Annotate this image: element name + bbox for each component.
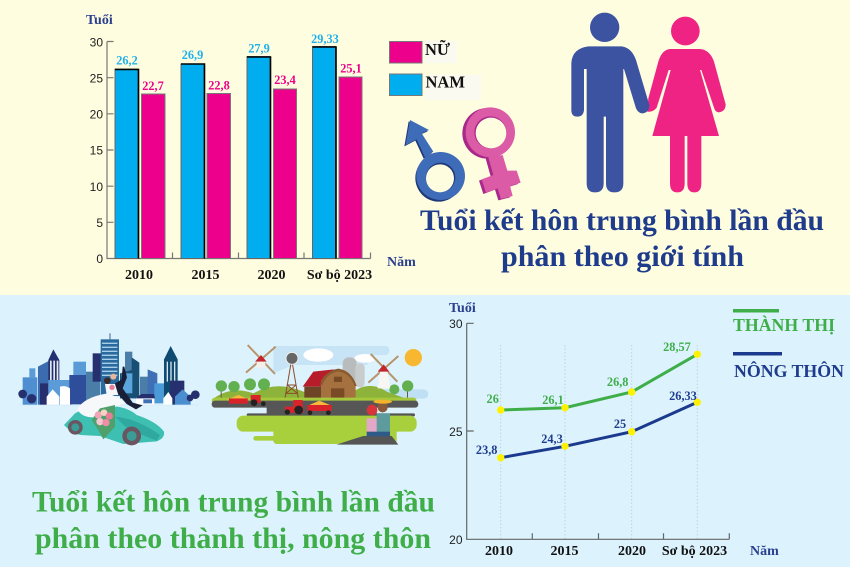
x labels: 2020 bbox=[258, 268, 286, 283]
hills bbox=[212, 386, 410, 400]
legend label: nong thon: NÔNG THÔN bbox=[734, 360, 844, 381]
value labels: thanh thi: 28,57 bbox=[663, 340, 691, 354]
line: nong thon bbox=[501, 402, 697, 458]
illustration: city and wedding car bbox=[18, 333, 200, 445]
value labels: nong thon: 26,33 bbox=[669, 389, 697, 403]
point markers bbox=[497, 351, 701, 461]
bouquet bbox=[92, 405, 115, 439]
y tick labels: 30 bbox=[90, 36, 103, 50]
tractor small with trailer bbox=[229, 395, 266, 406]
legend label: nam: NAM bbox=[426, 72, 465, 92]
ground and road bbox=[212, 398, 418, 444]
icon: female symbol bbox=[462, 107, 521, 200]
value labels: nu: 22,8 bbox=[208, 78, 230, 92]
legend line: nong thon bbox=[733, 352, 782, 356]
couple sitting bbox=[337, 400, 398, 445]
silos bbox=[343, 357, 365, 387]
value labels: thanh thi: 26,1 bbox=[542, 393, 564, 407]
x labels: Sơ bộ 2023 bbox=[307, 268, 372, 283]
trees bbox=[216, 378, 413, 398]
value labels: thanh thi bbox=[487, 340, 691, 407]
sky clouds bbox=[273, 346, 428, 399]
wedding car bbox=[64, 393, 164, 445]
value labels: nong thon: 23,8 bbox=[476, 443, 497, 457]
axes bbox=[107, 42, 370, 258]
legend line: thanh thi bbox=[733, 309, 779, 312]
barn bbox=[303, 369, 357, 399]
legend swatch: nam bbox=[390, 74, 422, 96]
icon: woman figure bbox=[647, 17, 726, 192]
x labels: 2015 bbox=[192, 268, 220, 283]
x axis title: Năm bbox=[387, 255, 416, 270]
x labels: Sơ bộ 2023 bbox=[662, 544, 727, 559]
y tick labels: 0 bbox=[96, 252, 103, 266]
x labels: 2020 bbox=[618, 544, 646, 559]
value labels: nong thon bbox=[476, 389, 697, 457]
icon: man figure bbox=[571, 13, 649, 192]
legend: urban rural bbox=[733, 309, 844, 381]
illustration: countryside farm bbox=[212, 345, 428, 445]
value labels: nu: 23,4 bbox=[274, 73, 296, 87]
city skyline bbox=[18, 333, 200, 405]
value labels: nam: 26,9 bbox=[182, 48, 203, 62]
heading: urban rural: phân theo thành thị, nông thôn bbox=[35, 523, 431, 555]
y axis title: Tuổi bbox=[449, 301, 476, 316]
y tick labels: 25 bbox=[449, 425, 463, 439]
x labels: 2015 bbox=[550, 544, 578, 559]
legend swatch: nu bbox=[390, 42, 422, 63]
tractor large with trailer bbox=[285, 400, 332, 415]
value labels: nong thon: 25 bbox=[614, 417, 626, 431]
value labels: nu: 25,1 bbox=[340, 62, 362, 76]
panel: bottom background bbox=[0, 295, 850, 567]
water tower windmill bbox=[285, 352, 298, 398]
x axis title: Năm bbox=[750, 544, 779, 559]
icon: sun bbox=[405, 349, 422, 366]
heading: urban rural: Tuổi kết hôn trung bình lần đầu bbox=[32, 486, 435, 518]
y tick labels: 25 bbox=[90, 72, 103, 86]
value labels: thanh thi: 26 bbox=[487, 392, 499, 406]
y tick labels bbox=[90, 36, 103, 266]
x labels bbox=[125, 268, 372, 283]
y tick labels: 5 bbox=[96, 216, 103, 230]
bars: nam bbox=[115, 46, 336, 258]
windmill left bbox=[246, 345, 276, 374]
y tick labels: 15 bbox=[90, 144, 103, 158]
line chart: age by urban and rural bbox=[449, 301, 779, 559]
value labels: nu: 22,7 bbox=[142, 79, 164, 93]
y axis title: Tuổi bbox=[86, 13, 113, 28]
bride and groom bbox=[104, 367, 143, 409]
heading: gender: Tuổi kết hôn trung bình lần đầu bbox=[420, 205, 824, 237]
y tick labels: 10 bbox=[90, 180, 103, 194]
heading: gender: phân theo giới tính bbox=[501, 241, 744, 273]
legend label: thanh thi: THÀNH THỊ bbox=[733, 314, 835, 335]
dotted guides bbox=[501, 345, 697, 539]
y tick labels: 20 bbox=[90, 108, 103, 122]
icon: male symbol bbox=[404, 120, 465, 202]
legend: gender bbox=[390, 39, 481, 100]
x labels bbox=[485, 544, 727, 559]
bar chart: age by gender bbox=[86, 13, 416, 283]
value labels: nam: 26,2 bbox=[116, 54, 138, 68]
value labels: nam bbox=[116, 32, 339, 68]
windmill right bbox=[368, 354, 398, 388]
x labels: 2010 bbox=[125, 268, 153, 283]
value labels: nam: 29,33 bbox=[311, 32, 339, 46]
value labels: nong thon: 24,3 bbox=[541, 432, 563, 446]
value labels: nu bbox=[142, 62, 362, 93]
value labels: nam: 27,9 bbox=[248, 42, 270, 56]
legend label: nu: NỮ bbox=[425, 39, 450, 59]
line: thanh thi bbox=[501, 354, 697, 410]
y tick labels bbox=[449, 317, 463, 547]
bar dark edges bbox=[115, 47, 336, 258]
x labels: 2010 bbox=[485, 544, 513, 559]
y tick labels: 20 bbox=[449, 533, 463, 547]
axes bbox=[467, 323, 729, 539]
bars: nu bbox=[142, 77, 362, 258]
value labels: thanh thi: 26,8 bbox=[607, 375, 628, 389]
y tick labels: 30 bbox=[449, 317, 463, 331]
panel: top background bbox=[0, 0, 850, 295]
